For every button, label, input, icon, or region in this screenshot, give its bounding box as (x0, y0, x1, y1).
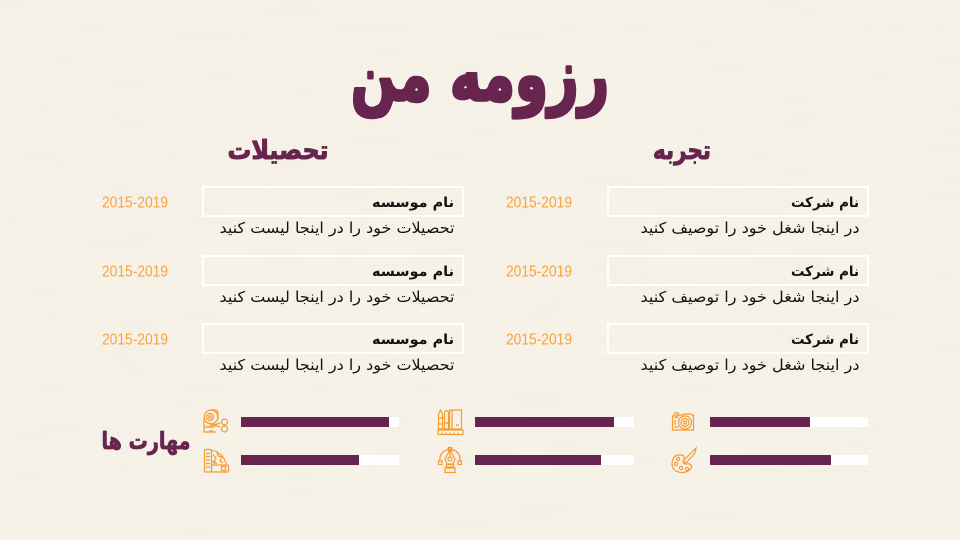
experience entry 2: 2015-2019 (506, 264, 572, 280)
education entry 3: 2015-2019 (102, 332, 168, 348)
skill bar 3 (475, 417, 634, 427)
education entry 2: تحصیلات خود را در اینجا لیست کنید (220, 288, 454, 306)
panel: education entries (102, 187, 463, 374)
education entry 1: تحصیلات خود را در اینجا لیست کنید (220, 219, 454, 237)
heading: education: تحصیلات (228, 136, 328, 166)
education entry 1: 2015-2019 (102, 194, 168, 212)
heading: experience: تجربه (653, 136, 711, 166)
experience entry 3 (506, 324, 868, 374)
education entry 3 (102, 324, 463, 374)
experience entry 1 (506, 187, 868, 237)
panel: skills (204, 410, 868, 473)
experience entry 2 (506, 256, 868, 306)
icon: painter's palette (672, 448, 696, 473)
experience entry 3: 2015-2019 (506, 332, 572, 348)
title: رزومه من (351, 33, 609, 118)
education entry 3: نام موسسه (372, 332, 454, 348)
icon: notebook, pencils and ruler (438, 410, 463, 434)
skill bar 4 (475, 455, 634, 465)
icon: film reel and scissors (204, 410, 228, 432)
skill bar 2 (241, 455, 399, 465)
skill bar 5 (710, 417, 868, 427)
experience entry 2: در اینجا شغل خود را توصیف کنید (640, 288, 860, 306)
experience entry 3: نام شرکت (791, 332, 859, 348)
experience entry 1: 2015-2019 (506, 194, 572, 212)
skill bar 1 (241, 417, 399, 427)
experience entry 3: در اینجا شغل خود را توصیف کنید (640, 356, 860, 374)
heading: skills: مهارت ها (102, 427, 190, 455)
education entry 1: نام موسسه (372, 195, 454, 211)
education entry 1 (102, 187, 463, 237)
icon: camera (672, 413, 694, 430)
icon: pen tool (438, 448, 462, 472)
education entry 2: نام موسسه (372, 264, 454, 280)
education entry 2: 2015-2019 (102, 264, 168, 280)
experience entry 1: در اینجا شغل خود را توصیف کنید (640, 219, 860, 237)
panel: experience entries (506, 187, 868, 374)
experience entry 2: نام شرکت (791, 264, 859, 280)
education entry 2 (102, 256, 463, 306)
skill bar 6 (710, 455, 868, 465)
icon: colour swatches (204, 450, 228, 472)
education entry 3: تحصیلات خود را در اینجا لیست کنید (220, 356, 454, 374)
experience entry 1: نام شرکت (791, 195, 859, 211)
